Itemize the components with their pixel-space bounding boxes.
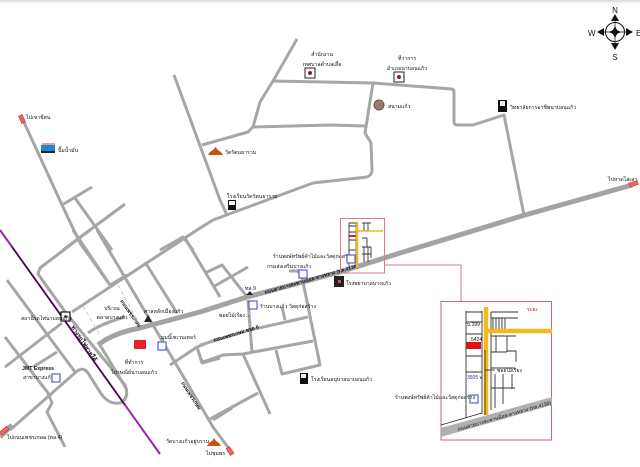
icon: shrine xyxy=(144,315,152,322)
label: railway line: ทางรถไฟสายใต้ xyxy=(69,324,99,363)
label: highway: ถนนสายบางสะพานน้อย-ทางหลวง (ทล.4138) xyxy=(264,262,359,296)
label: shop in inset: ร้านพงษ์ทรัพย์ค้าไม้และวัสดุก่อสร้าง xyxy=(395,393,476,401)
label: district office: อำเภอนาบอนแก้ว xyxy=(387,65,427,72)
icon: sports field xyxy=(374,100,384,110)
icon: T-junction marker xyxy=(246,291,253,295)
label: alley: ซอยไม้เรียง→ xyxy=(219,311,250,319)
panel: detail inset xyxy=(441,302,552,440)
label: temple north: วัดรัตนธาราม xyxy=(225,149,256,156)
inset shop icon xyxy=(470,395,478,403)
inset label: alley: ซอยไม้เรียง xyxy=(497,367,522,374)
label: to north-west: ไปเขาชีสน xyxy=(25,113,51,121)
label: road B: ถนนเพชรเกษม xyxy=(179,381,202,411)
inset label: blue number: 3505 ๒ xyxy=(467,375,483,381)
inset arrow xyxy=(485,350,495,415)
label: school: โรงเรียนวัดรัตนธาราม xyxy=(227,193,277,200)
inset highlighted road xyxy=(484,307,488,415)
main road xyxy=(98,185,632,345)
label: road A: ถนนเพชรเกษม xyxy=(118,299,142,329)
label: temple south: วัดบางแก้วอยู่บราน xyxy=(166,438,210,445)
label: school south: โรงเรียนอนุบาลนาบอนแก้ว xyxy=(311,376,372,383)
icon: temple south xyxy=(207,438,221,446)
icon: hospital xyxy=(334,276,344,287)
label: municipal office: เทศบาลตำบลเสื่อ xyxy=(303,61,341,68)
icon: college xyxy=(498,100,507,112)
icon: district office xyxy=(394,72,404,82)
label: college: วิทยาลัยการอาชีพนาบอนแก้ว xyxy=(510,104,576,111)
label: JMT: JMT Express xyxy=(22,366,54,372)
label: petrol station: ปั๊มน้ำมัน xyxy=(58,146,79,154)
label: soi 6: ถนนเพชรเกษม ซอย 6 xyxy=(213,324,260,344)
label: post office: ไปรษณีย์นาบอนแก้ว xyxy=(110,368,157,376)
icon: shop 1 xyxy=(249,301,257,309)
compass: N xyxy=(612,6,618,15)
label: to Chumphon: ไปชุมพร xyxy=(205,449,225,457)
inset label: number: 5424 xyxy=(471,337,482,343)
inset label: road: ถนนสายบางสะพานน้อย-ทางหลวง (ทล.4138) xyxy=(457,399,552,433)
icon: petrol station xyxy=(41,143,55,153)
label: shrine: ศาลหลักเมืองแก้ว xyxy=(144,308,183,315)
icon: temple north xyxy=(208,147,223,155)
label: mini-mart: มุมมิ๊เซเวนเทอร์ xyxy=(161,333,196,341)
panel: locator box xyxy=(340,218,384,273)
label: market: บริเวณ xyxy=(104,305,120,312)
icon: school south xyxy=(300,373,308,384)
label: district office: ที่ว่าการ xyxy=(398,55,416,62)
icon: shop 2 xyxy=(299,270,307,278)
railway xyxy=(0,230,160,454)
label: shop 3: ร้านพงษ์ทรัพย์ค้าไม้และวัสดุก่อสร้าง xyxy=(273,252,354,260)
road ends: red tips xyxy=(0,115,638,455)
label: to the east: ไปหาดไล่เลา xyxy=(607,175,637,183)
inset red lot xyxy=(466,342,481,349)
inset branch xyxy=(488,329,552,333)
label: municipal office: สำนักงาน xyxy=(311,51,333,58)
label: shop 1: ร้านบางแก้ว วัสดุก่อสร้าง xyxy=(260,303,316,310)
compass: W xyxy=(588,29,596,38)
label: railway station: สถานีรถไฟนาบอนแก้ว xyxy=(21,314,72,322)
compass xyxy=(588,6,640,62)
label: junction: ทล.9 xyxy=(245,286,256,292)
label: sports field: สนามแก้ว xyxy=(388,103,411,110)
icon: JMT shop xyxy=(52,374,60,382)
label: shop 2: กรมส่งเสริมบางแก้ว xyxy=(267,263,311,270)
inset label: plot: บ.399 xyxy=(467,322,480,328)
inset road xyxy=(441,397,552,437)
label: market: ตลาดบางแก้ว xyxy=(97,314,128,321)
icon: mini-mart xyxy=(158,342,166,350)
icon: post office xyxy=(134,340,146,349)
label: JMT branch: สาขาบางแก้ว xyxy=(23,374,54,381)
market dashes xyxy=(83,285,140,335)
icon: railway station xyxy=(61,312,70,321)
inset side streets xyxy=(466,311,518,418)
label: post office: ที่ทำการ xyxy=(125,359,144,366)
icon: municipal office xyxy=(305,68,315,78)
label: to Highway 4: ไปถนนเพชรเกษม (ทล.4) xyxy=(6,433,62,441)
label: hospital: โรงพยาบาลบางแก้ว xyxy=(346,280,391,287)
inset label: scale: ระยะ xyxy=(527,307,538,313)
icon: school xyxy=(228,200,236,210)
compass: S xyxy=(612,53,618,62)
connector line xyxy=(384,265,461,302)
